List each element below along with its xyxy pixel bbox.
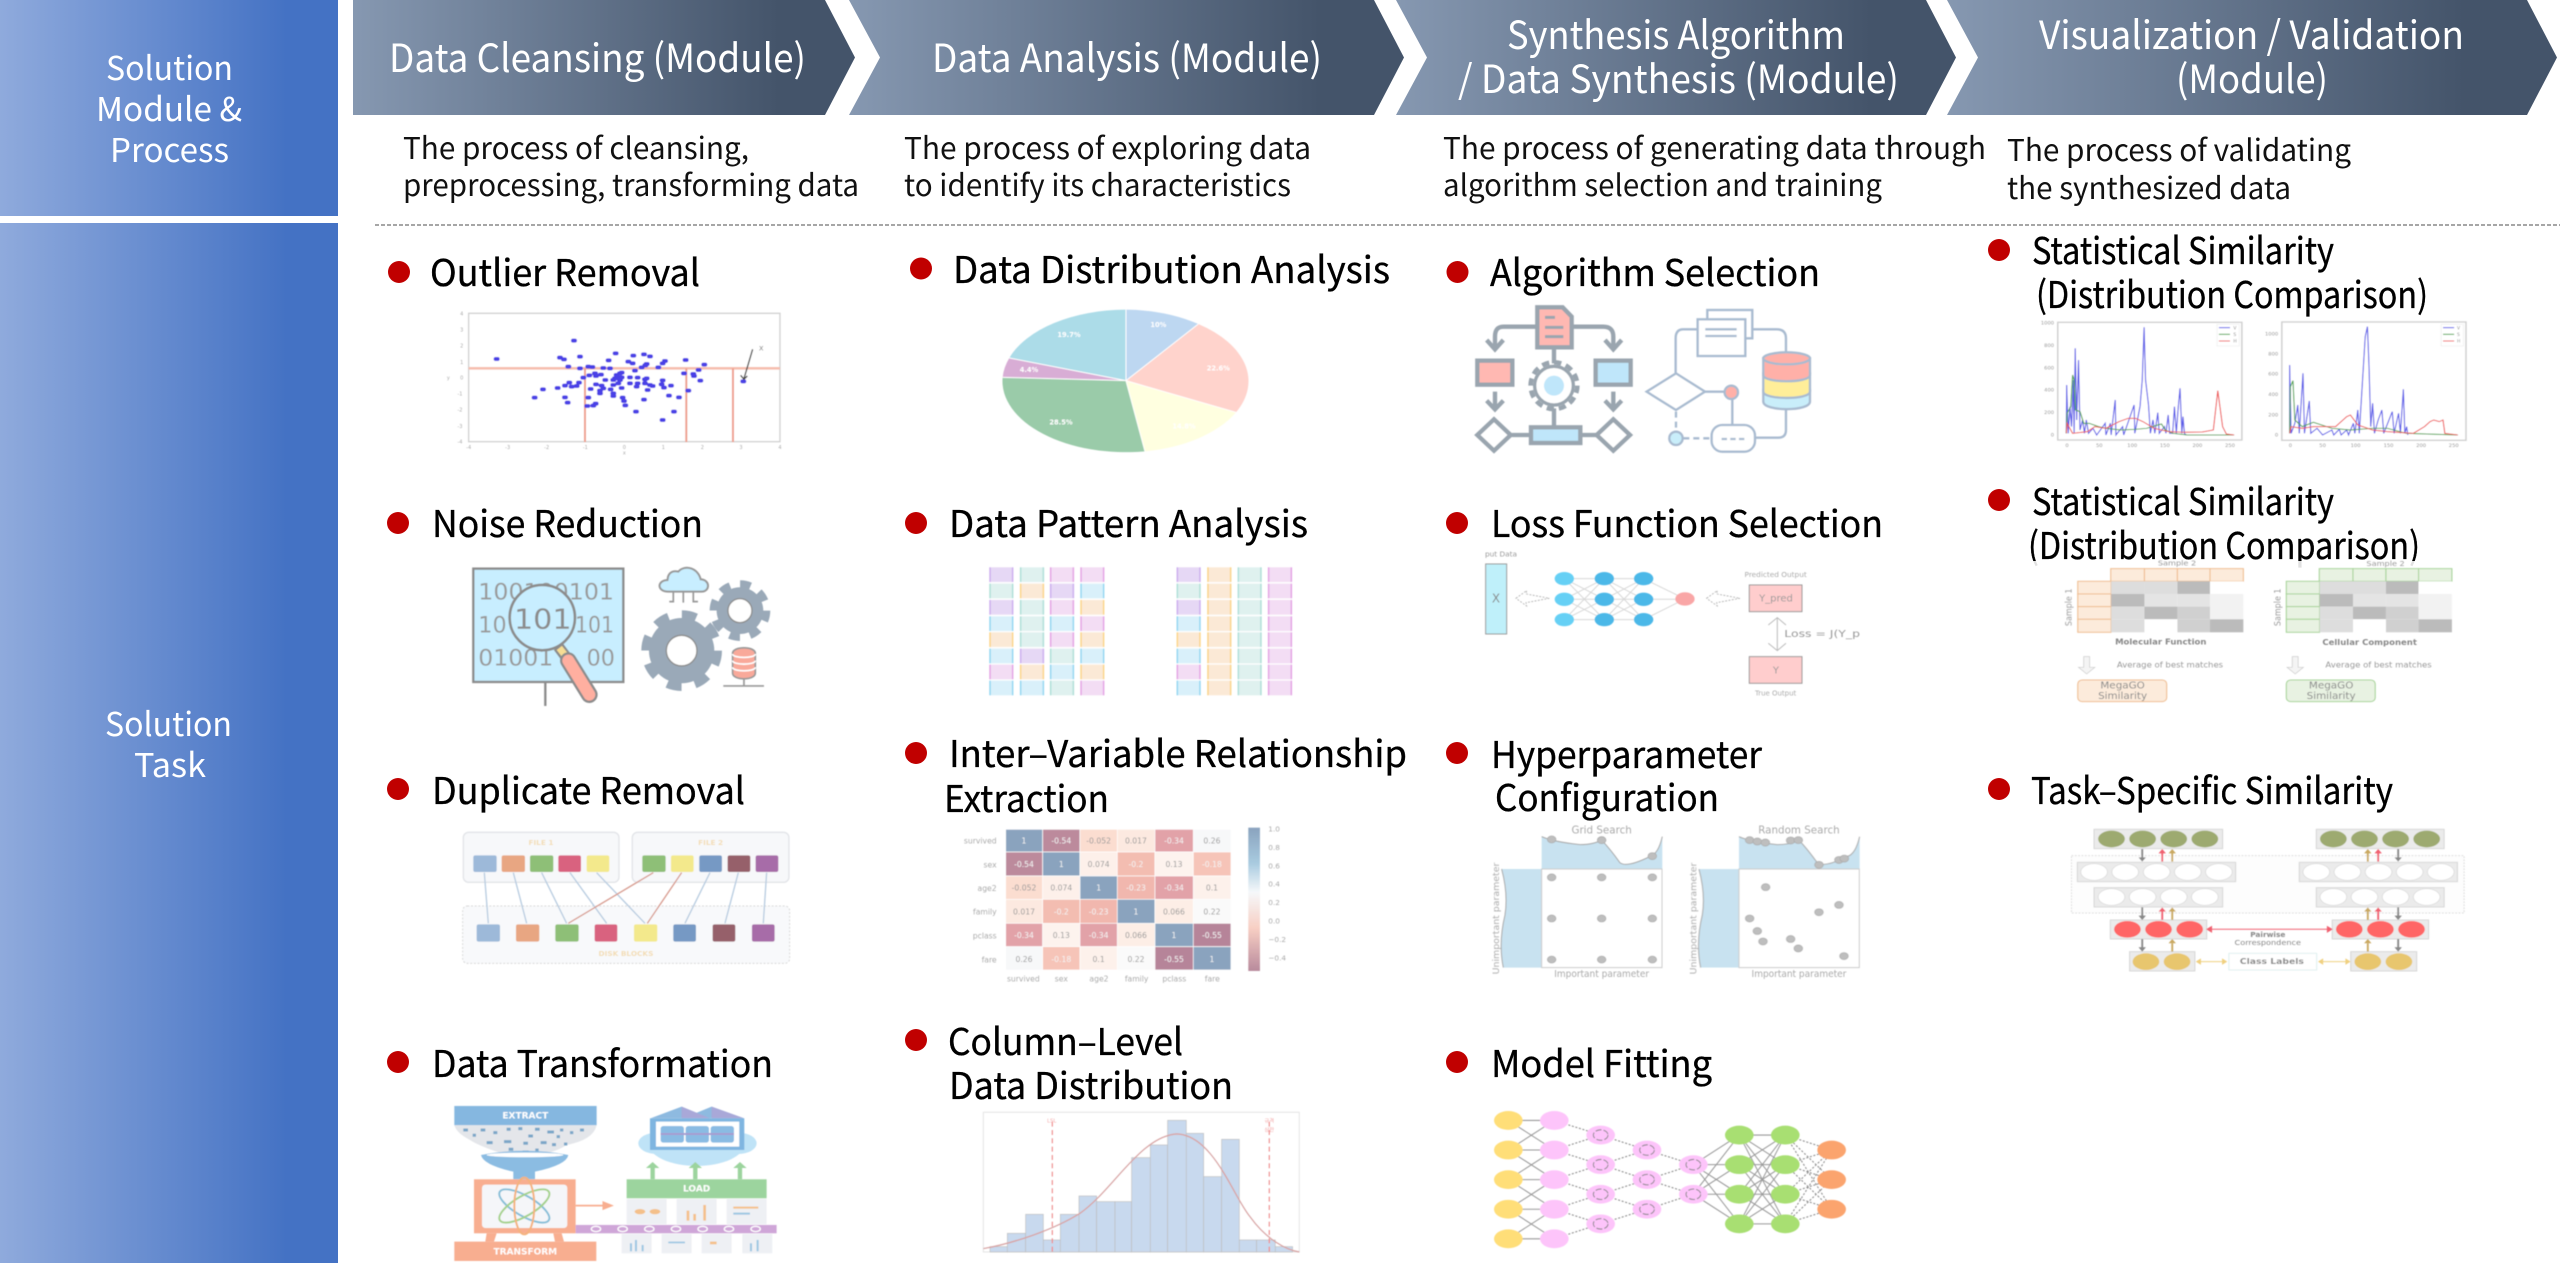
- chart: distribution comparison line charts: 50: [2319, 443, 2326, 449]
- arrow: Synthesis Algorithm module header: / Data Synthesis (Module): [1458, 49, 1899, 105]
- chart: model fitting network: [1494, 1111, 1846, 1248]
- chart: extract transform load diagram: LOAD: [683, 1185, 710, 1195]
- heading: Outlier Removal: Outlier Removal: [430, 243, 700, 297]
- chart: outlier scatter plot: 0: [623, 445, 626, 451]
- heading: Algorithm Selection: Algorithm Selection: [1490, 243, 1820, 297]
- chart: data pattern columns: [989, 567, 1292, 695]
- chart: distribution comparison line charts: H: [2233, 339, 2237, 344]
- chart: correlation heatmap: -0.2: [1128, 860, 1144, 869]
- chart: outlier scatter plot: 0: [460, 376, 463, 382]
- icon: noise reduction magnifier and gears: 00: [587, 647, 615, 672]
- chart: outlier scatter plot: -1: [583, 445, 588, 451]
- chart: correlation heatmap: -0.34: [1014, 931, 1034, 940]
- heading: Inter-Variable Relationship Extraction: Extraction: [944, 769, 1109, 823]
- chart: loss function neural network: [1485, 549, 1860, 698]
- chart: correlation heatmap: 1: [1210, 955, 1215, 964]
- chart: loss function neural network: Loss = J(Y_p: [1784, 629, 1860, 640]
- chart: distribution comparison line charts: 400: [2268, 392, 2278, 398]
- chart: correlation heatmap: sex: [984, 860, 997, 869]
- chart: correlation heatmap: -0.052: [1012, 884, 1036, 893]
- panel: Solution Task row label: Solution: [105, 698, 232, 746]
- chart: loss function neural network: put Data: [1485, 549, 1517, 558]
- chart: outlier scatter plot: -2: [457, 408, 462, 414]
- arrow: Visualization / Validation module header: [1947, 0, 2557, 115]
- arrow: Data Analysis module header: Data Analysis (Module): [932, 28, 1322, 84]
- chart: distribution comparison line charts: 600: [2044, 366, 2054, 371]
- arrow: Data Cleansing module header: [353, 0, 855, 115]
- chart: MegaGO similarity matrices: MegaGO: [2100, 681, 2145, 691]
- chart: distribution comparison line charts: 1000: [2265, 332, 2278, 337]
- chart: correlation heatmap: 0.22: [1203, 907, 1221, 916]
- chart: MegaGO similarity matrices: Average of best matches: [2117, 660, 2223, 669]
- chart: duplicate removal file blocks: DISK BLOCKS: [599, 949, 653, 958]
- panel: Solution Module & Process row label: [0, 0, 338, 216]
- chart: correlation heatmap: 0.26: [1203, 836, 1221, 845]
- chart: correlation heatmap: -0.54: [1051, 836, 1071, 845]
- chart: loss function neural network: True Output: [1754, 690, 1797, 698]
- chart: correlation heatmap: pclass: [973, 931, 997, 940]
- icon: noise reduction magnifier and gears: 100100101: [478, 580, 614, 605]
- chart: distribution comparison line charts: 1000: [2041, 321, 2054, 327]
- chart: outlier scatter plot: -4: [457, 440, 462, 446]
- chart: pie chart: 10%: [1150, 321, 1167, 329]
- chart: MegaGO similarity matrices: MegaGO: [2309, 681, 2354, 691]
- chart: distribution comparison line charts: 250: [2449, 443, 2459, 449]
- chart: MegaGO similarity matrices: Sample 1: [2272, 589, 2282, 626]
- heading: Inter-Variable Relationship Extraction: Inter–Variable Relationship: [949, 724, 1407, 778]
- heading: Statistical Similarity (Distribution Comparison): (Distribution Comparison): [2036, 265, 2428, 319]
- chart: outlier scatter plot: [447, 311, 782, 457]
- chart: correlation heatmap: 0.1: [1093, 955, 1105, 964]
- text block: cleansing description: The process of cleansing,: [403, 124, 749, 168]
- chart: outlier scatter plot: -3: [457, 424, 462, 430]
- heading: Data Transformation: Data Transformation: [432, 1034, 773, 1088]
- chart: outlier scatter plot: x: [759, 344, 764, 353]
- chart: outlier scatter plot: 2: [460, 344, 463, 350]
- heading: Hyperparameter Configuration: [1446, 725, 1763, 822]
- chart: duplicate removal file blocks: FILE 1: [528, 838, 554, 847]
- chart: distribution comparison line charts: V: [2233, 326, 2237, 330]
- heading: Statistical Similarity (Distribution Comparison): [1988, 221, 2428, 319]
- chart: grid search and random search: Grid Search: [1571, 824, 1632, 837]
- chart: MegaGO similarity matrices: Sample 2: [2158, 559, 2196, 567]
- chart: column distribution histogram: [983, 1112, 1299, 1252]
- chart: pie chart: 22.6%: [1207, 365, 1230, 373]
- heading: Column-Level Data Distribution: [905, 1012, 1233, 1110]
- chart: pie chart: 19.7%: [1057, 331, 1081, 339]
- chart: correlation heatmap: fare: [982, 955, 997, 964]
- chart: distribution comparison line charts: 200: [2192, 443, 2202, 449]
- chart: correlation heatmap: -0.34: [1164, 836, 1184, 845]
- text block: analysis description: [904, 124, 1311, 205]
- chart: distribution comparison line charts: 200: [2416, 443, 2426, 449]
- chart: correlation heatmap: -0.23: [1089, 907, 1109, 916]
- heading: Statistical Similarity (Distribution Comparison) second: [1988, 472, 2420, 570]
- heading: Column-Level Data Distribution: Data Distribution: [949, 1056, 1233, 1110]
- chart: distribution comparison line charts: 800: [2044, 343, 2054, 349]
- panel: Solution Task row label: Task: [134, 739, 206, 787]
- chart: distribution comparison line charts: 150: [2160, 443, 2170, 449]
- text block: synthesis description: [1443, 124, 1986, 205]
- chart: distribution comparison line charts: 100: [2351, 443, 2361, 449]
- chart: correlation heatmap: family: [1125, 974, 1149, 983]
- chart: correlation heatmap: 0.26: [1015, 955, 1033, 964]
- heading: Duplicate Removal: Duplicate Removal: [432, 761, 745, 815]
- text block: validation description: the synthesized data: [2007, 164, 2291, 208]
- chart: correlation heatmap: 0.2: [1268, 898, 1280, 907]
- chart: column distribution histogram: LSL: [1047, 1119, 1056, 1125]
- heading: Model Fitting: Model Fitting: [1491, 1034, 1712, 1088]
- text block: cleansing description: [403, 124, 859, 205]
- chart: correlation heatmap: 0.017: [1125, 836, 1147, 845]
- chart: extract transform load diagram: TRANSFORM: [494, 1247, 557, 1257]
- arrow: Synthesis Algorithm module header: Synthesis Algorithm: [1507, 5, 1845, 61]
- chart: correlation heatmap: -0.55: [1202, 931, 1222, 940]
- chart: outlier scatter plot: 3: [739, 445, 743, 451]
- chart: correlation heatmap: 0.8: [1268, 843, 1280, 852]
- chart: task-specific similarity network: Pairwise: [2250, 930, 2286, 939]
- chart: task-specific similarity network: Class Labels: [2240, 957, 2304, 967]
- text block: synthesis description: The process of generating data through: [1443, 124, 1986, 168]
- chart: MegaGO similarity matrices: Cellular Component: [2322, 637, 2417, 647]
- heading: Hyperparameter Configuration: Configuration: [1495, 768, 1719, 822]
- arrow: Data Cleansing module header: Data Cleansing (Module): [389, 28, 806, 84]
- panel: Solution Task row label: [0, 223, 338, 1263]
- chart: correlation heatmap: -0.55: [1164, 955, 1184, 964]
- chart: correlation heatmap: 0.066: [1125, 931, 1147, 940]
- chart: correlation heatmap: -0.18: [1051, 955, 1071, 964]
- chart: correlation heatmap: -0.34: [1089, 931, 1109, 940]
- chart: MegaGO similarity matrices: Similarity: [2307, 691, 2356, 702]
- text block: validation description: [2007, 126, 2351, 208]
- chart: correlation heatmap: 0.066: [1163, 907, 1185, 916]
- chart: MegaGO similarity matrices: Sample 1: [2063, 589, 2074, 626]
- chart: outlier scatter plot: -4: [466, 445, 471, 451]
- chart: grid search and random search: Unimportant parameter: [1688, 862, 1699, 974]
- heading: Statistical Similarity (Distribution Comparison): Statistical Similarity: [2032, 221, 2334, 275]
- chart: distribution comparison line charts: 0: [2275, 433, 2278, 439]
- chart: correlation heatmap: 0.1: [1206, 884, 1218, 893]
- panel: Data Cleansing tasks: [387, 243, 790, 1261]
- panel: Solution Module & Process row label: Module &: [96, 83, 242, 131]
- chart: distribution comparison line charts: 200: [2044, 410, 2054, 416]
- chart: correlation heatmap: -0.052: [1086, 836, 1111, 845]
- chart: outlier scatter plot: 2: [701, 445, 704, 451]
- chart: distribution comparison line charts: [2041, 321, 2466, 449]
- arrow: Visualization / Validation module header: Visualization / Validation: [2039, 5, 2464, 61]
- chart: correlation heatmap: 0.13: [1165, 860, 1183, 869]
- chart: duplicate removal file blocks: [463, 832, 790, 963]
- chart: pie chart: [1002, 310, 1248, 452]
- chart: outlier scatter plot: 1: [460, 360, 463, 366]
- chart: grid search and random search: Unimportant parameter: [1491, 862, 1502, 974]
- chart: grid search and random search: Important parameter: [1752, 969, 1847, 980]
- chart: duplicate removal file blocks: FILE 2: [698, 838, 723, 847]
- chart: loss function neural network: X: [1492, 591, 1500, 605]
- chart: MegaGO similarity matrices: Average of best matches: [2325, 660, 2432, 669]
- chart: grid search and random search: Important parameter: [1554, 969, 1649, 980]
- chart: loss function neural network: Predicted Output: [1745, 570, 1807, 579]
- icon: noise reduction magnifier and gears: [473, 568, 767, 706]
- chart: pie chart: 4.4%: [1020, 366, 1039, 374]
- icon: noise reduction magnifier and gears: 101: [575, 614, 614, 639]
- chart: distribution comparison line charts: V: [2457, 326, 2460, 330]
- chart: correlation heatmap: sex: [1055, 974, 1068, 983]
- chart: correlation heatmap: 0.4: [1268, 880, 1280, 889]
- chart: correlation heatmap: -0.23: [1126, 884, 1146, 893]
- chart: distribution comparison line charts: 200: [2268, 413, 2278, 418]
- chart: correlation heatmap: -0.2: [1054, 907, 1069, 916]
- chart: correlation heatmap: 0.074: [1088, 860, 1110, 869]
- chart: outlier scatter plot: x: [623, 451, 626, 457]
- heading: Task-Specific Similarity: Task–Specific Similarity: [2031, 761, 2393, 815]
- heading: Inter-Variable Relationship Extraction: [905, 724, 1407, 823]
- chart: distribution comparison line charts: 50: [2096, 443, 2103, 449]
- panel: Solution Module & Process row label: Solution: [106, 42, 233, 90]
- chart: correlation heatmap: age2: [1089, 974, 1109, 983]
- chart: correlation heatmap: 0.017: [1013, 907, 1035, 916]
- heading: Noise Reduction: Noise Reduction: [432, 494, 703, 548]
- chart: distribution comparison line charts: 0: [2065, 443, 2069, 449]
- arrow: Data Analysis module header: [849, 0, 1404, 115]
- arrow: Synthesis Algorithm module header: [1396, 0, 1956, 115]
- chart: distribution comparison line charts: 600: [2268, 372, 2278, 378]
- text block: cleansing description: preprocessing, transforming data: [403, 161, 859, 205]
- chart: correlation heatmap: 1: [1172, 931, 1177, 940]
- icon: noise reduction magnifier and gears: 10: [478, 614, 507, 639]
- chart: grid search and random search: Random Search: [1758, 824, 1840, 837]
- chart: correlation heatmap: age2: [978, 884, 997, 893]
- chart: correlation heatmap: 1: [1134, 907, 1139, 916]
- panel: Synthesis Algorithm tasks: [1446, 243, 1883, 1248]
- chart: correlation heatmap: 0.0: [1268, 917, 1280, 926]
- chart: distribution comparison line charts: 100: [2127, 443, 2137, 449]
- chart: pie chart: 28.5%: [1049, 419, 1073, 427]
- chart: distribution comparison line charts: 800: [2268, 352, 2278, 358]
- chart: correlation heatmap: 1.0: [1268, 825, 1280, 834]
- chart: correlation heatmap: survived: [1007, 974, 1040, 983]
- chart: MegaGO similarity matrices: [2063, 559, 2452, 702]
- chart: MegaGO similarity matrices: Sample 2: [2366, 559, 2405, 568]
- chart: outlier scatter plot: 4: [460, 311, 463, 317]
- text block: analysis description: The process of exploring data: [904, 124, 1311, 168]
- icon: noise reduction magnifier and gears: 101: [514, 602, 572, 635]
- heading: Hyperparameter Configuration: Hyperparameter: [1491, 725, 1763, 779]
- heading: Data Pattern Analysis: Data Pattern Analysis: [949, 494, 1308, 548]
- chart: outlier scatter plot: 4: [778, 445, 782, 451]
- chart: correlation heatmap: family: [973, 908, 997, 917]
- chart: outlier scatter plot: 1: [662, 445, 665, 451]
- icon: noise reduction magnifier and gears: 01001: [478, 647, 553, 672]
- heading: Statistical Similarity (Distribution Comparison) second: (Distribution Comparison): [2028, 516, 2420, 570]
- chart: distribution comparison line charts: H: [2457, 339, 2460, 344]
- chart: extract transform load diagram: EXTRACT: [502, 1112, 549, 1122]
- chart: correlation heatmap: 0.13: [1053, 931, 1070, 940]
- chart: correlation heatmap: −0.4: [1268, 953, 1286, 962]
- text block: validation description: The process of validating: [2007, 126, 2351, 170]
- chart: extract transform load diagram: [454, 1106, 777, 1261]
- chart: outlier scatter plot: -2: [544, 445, 549, 451]
- chart: correlation heatmap: 0.074: [1050, 884, 1072, 893]
- text block: analysis description: to identify its characteristics: [904, 161, 1291, 205]
- chart: grid search and random search: [1491, 824, 1860, 980]
- text block: synthesis description: algorithm selection and training: [1443, 161, 1882, 205]
- chart: correlation heatmap: fare: [1205, 974, 1220, 983]
- chart: correlation heatmap: 1: [1096, 884, 1101, 893]
- heading: Data Distribution Analysis: Data Distribution Analysis: [953, 240, 1390, 294]
- heading: Statistical Similarity (Distribution Comparison) second: Statistical Similarity: [2032, 472, 2334, 526]
- panel: Solution Module & Process row label: Process: [110, 124, 229, 172]
- chart: distribution comparison line charts: 0: [2051, 433, 2054, 439]
- chart: distribution comparison line charts: 0: [2289, 443, 2292, 449]
- chart: distribution comparison line charts: 400: [2044, 388, 2054, 394]
- chart: correlation heatmap: 1: [1059, 860, 1064, 869]
- chart: outlier scatter plot: -1: [457, 392, 462, 398]
- chart: correlation heatmap: -0.18: [1202, 860, 1222, 869]
- heading: Loss Function Selection: Loss Function Selection: [1491, 494, 1883, 548]
- chart: correlation heatmap: 0.22: [1127, 955, 1145, 964]
- chart: distribution comparison line charts: S: [2457, 332, 2460, 337]
- chart: correlation heatmap: -0.34: [1164, 884, 1184, 893]
- chart: outlier scatter plot: 3: [460, 327, 463, 333]
- panel: Data Analysis tasks: [905, 240, 1407, 1252]
- icon: algorithm selection flowcharts: [1477, 307, 1810, 452]
- chart: distribution comparison line charts: S: [2233, 332, 2237, 337]
- chart: correlation heatmap: [964, 825, 1286, 983]
- chart: loss function neural network: Y_pred: [1758, 593, 1793, 604]
- chart: outlier scatter plot: -3: [505, 445, 510, 451]
- heading: Column-Level Data Distribution: Column–Level: [948, 1012, 1183, 1066]
- chart: outlier scatter plot: y: [447, 375, 450, 381]
- chart: correlation heatmap: 0.6: [1268, 861, 1280, 870]
- arrow: Visualization / Validation module header: (Module): [2176, 49, 2328, 105]
- chart: pie chart: 14.8%: [1172, 422, 1196, 430]
- chart: column distribution histogram: 상한: [1264, 1126, 1274, 1134]
- panel: Visualization / Validation tasks: [1988, 221, 2466, 971]
- chart: task-specific similarity network: Correspondence: [2235, 938, 2301, 947]
- chart: correlation heatmap: 1: [1022, 836, 1027, 845]
- chart: correlation heatmap: survived: [964, 836, 997, 845]
- chart: correlation heatmap: -0.54: [1014, 860, 1034, 869]
- chart: correlation heatmap: pclass: [1162, 974, 1186, 983]
- chart: task-specific similarity network: [2071, 829, 2464, 971]
- chart: MegaGO similarity matrices: Similarity: [2098, 691, 2147, 702]
- chart: loss function neural network: Y: [1772, 666, 1780, 677]
- chart: distribution comparison line charts: 150: [2384, 443, 2393, 449]
- chart: distribution comparison line charts: 250: [2225, 443, 2235, 449]
- chart: column distribution histogram: 규격: [1264, 1117, 1274, 1125]
- chart: MegaGO similarity matrices: Molecular Function: [2115, 637, 2207, 646]
- chart: correlation heatmap: −0.2: [1268, 935, 1286, 944]
